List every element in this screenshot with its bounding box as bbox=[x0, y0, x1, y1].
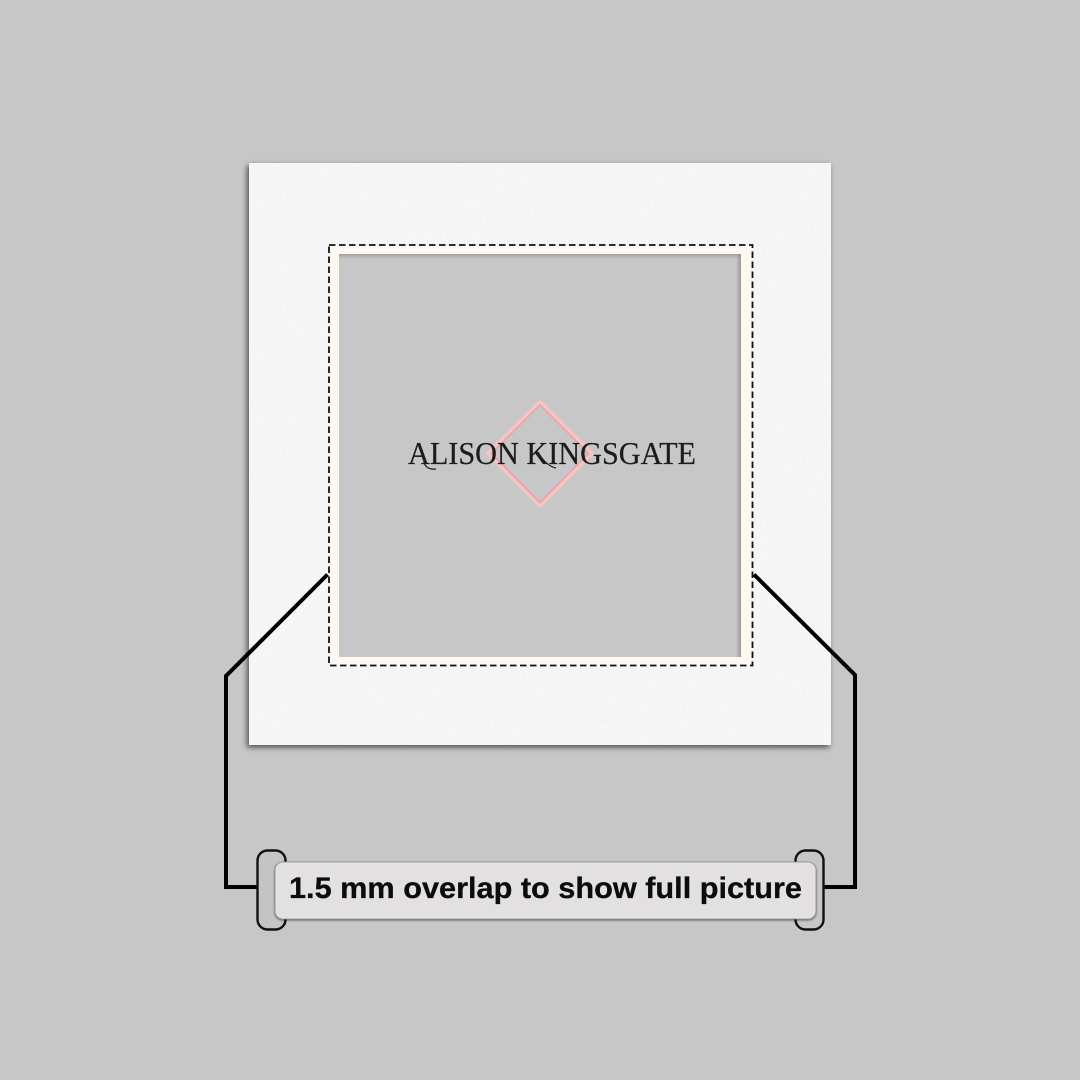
board grain texture bbox=[249, 163, 831, 745]
picture window bbox=[339, 254, 741, 657]
cream bevel edge bbox=[331, 247, 751, 664]
logo diamond bbox=[488, 402, 592, 506]
mount board bbox=[249, 163, 831, 745]
logo flourishes bbox=[424, 452, 556, 469]
right bracket tab bbox=[796, 850, 824, 930]
callout box bbox=[275, 862, 816, 919]
left leader arrow bbox=[226, 574, 328, 887]
window right inner shadow bbox=[736, 254, 741, 657]
panel: mount board with window bbox=[249, 163, 831, 745]
right leader arrow bbox=[754, 574, 855, 887]
window top inner shadow bbox=[339, 254, 741, 259]
callout label bbox=[275, 862, 816, 919]
left bracket tab bbox=[258, 850, 286, 930]
callout text: 1.5 mm overlap to show full picture bbox=[289, 872, 802, 905]
logo bbox=[408, 402, 696, 506]
dashed overlap outline bbox=[329, 245, 752, 666]
logo wordmark: ALISON KINGSGATE bbox=[408, 435, 696, 471]
